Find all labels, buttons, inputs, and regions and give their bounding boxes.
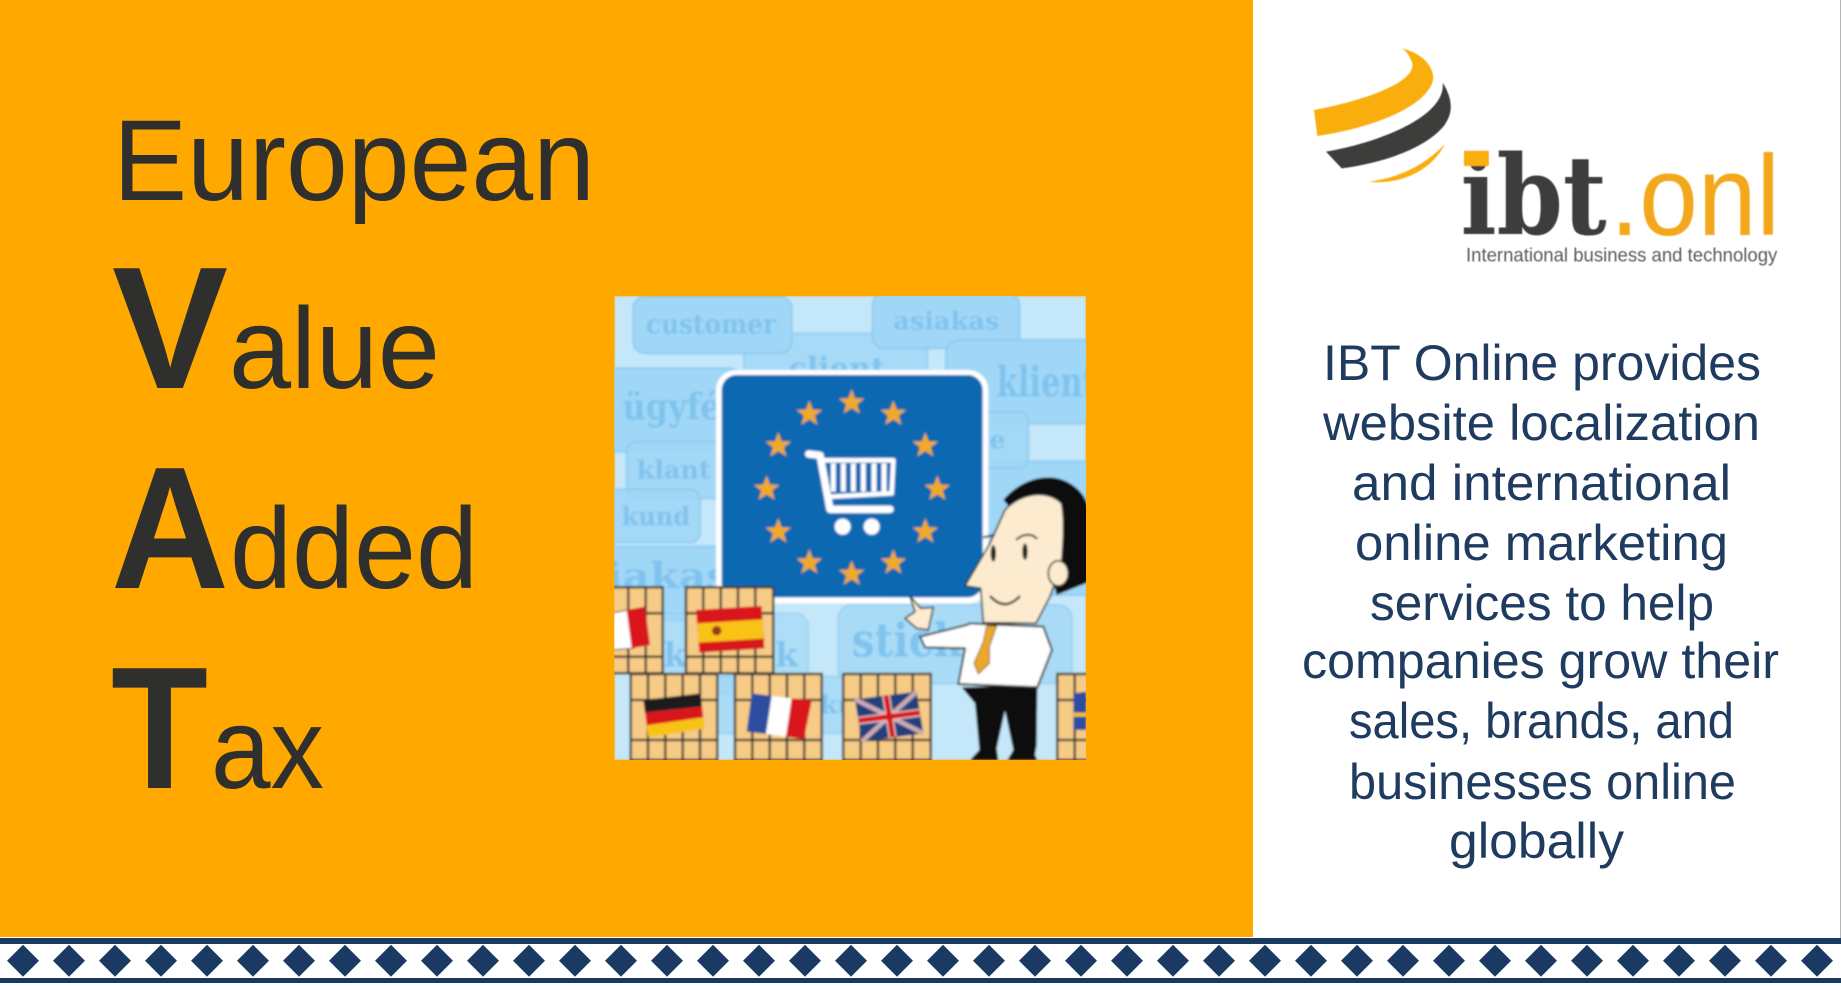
- illustration background: [614, 296, 1086, 760]
- word tags in many languages: client: [788, 351, 885, 386]
- word tags in many languages: ku: [820, 689, 856, 719]
- logo wordmark: ibt: [1461, 131, 1607, 260]
- face: [965, 494, 1064, 623]
- text block: company description: businesses online: [1349, 754, 1736, 810]
- crate: Spain flag: [686, 587, 773, 673]
- heading word: Value: alue: [229, 285, 440, 413]
- heading word: Tax: ax: [211, 685, 324, 813]
- crate: left flag: [607, 587, 663, 673]
- heading word: Added: dded: [230, 485, 478, 613]
- word tags in many languages: k: [663, 636, 687, 675]
- text block: company description: companies grow their: [1302, 633, 1779, 689]
- text block: company description: services to help: [1370, 575, 1714, 631]
- decorative diamond border band: [0, 937, 1841, 986]
- text block: company description: [1302, 335, 1779, 869]
- EU sign with stars and shopping cart: [716, 370, 988, 603]
- heading word: Value: [112, 230, 440, 425]
- ear: [1048, 561, 1068, 586]
- word tags in many languages: asiakas: [893, 305, 999, 335]
- crate: Germany flag: [631, 674, 717, 760]
- heading word: Added: A: [111, 430, 229, 625]
- logo tagline: International business and technology: [1466, 246, 1778, 267]
- illustration: EU online shopping with man, sign and crates: [600, 293, 1113, 760]
- text block: company description: globally: [1449, 813, 1624, 869]
- legs and shoes: [962, 685, 1037, 760]
- pointing hand: [905, 596, 933, 630]
- heading word: Added: [111, 430, 478, 625]
- logo globe swooshes: [1314, 48, 1451, 182]
- title: European Value Added Tax: [111, 97, 595, 825]
- shirt and arm: [920, 623, 1052, 687]
- panel: orange background: [0, 0, 1253, 938]
- word tags in many languages: klient: [997, 358, 1097, 407]
- necktie: [974, 626, 997, 674]
- word tags in many languages: ügyfél: [623, 385, 733, 428]
- heading word: European: European: [113, 97, 595, 225]
- logo wordmark: [1461, 131, 1780, 260]
- word tags in many languages: stick: [852, 614, 963, 669]
- crate: France flag: [735, 674, 822, 760]
- heading word: Value: V: [112, 230, 228, 425]
- word tags in many languages: [600, 293, 1113, 733]
- logo: ibt.onl: [1314, 48, 1780, 267]
- shipping crates with flags: [607, 587, 1104, 760]
- cartoon man pointing at the sign: [905, 477, 1090, 760]
- text block: company description: sales, brands, and: [1349, 693, 1734, 749]
- word tags in many languages: k: [775, 636, 799, 675]
- heading word: Tax: [111, 630, 324, 825]
- text block: company description: and international: [1352, 455, 1731, 511]
- text block: company description: IBT Online provides: [1323, 335, 1761, 391]
- text block: company description: website localization: [1322, 395, 1760, 451]
- logo wordmark: .onl: [1610, 133, 1780, 260]
- word tags in many languages: customer: [646, 309, 777, 340]
- hair: [1003, 477, 1090, 595]
- shopping cart icon: [809, 454, 893, 535]
- word tags in many languages: iakas: [607, 554, 730, 597]
- crate: right edge flag: [1054, 671, 1086, 760]
- facial features: [984, 535, 1037, 604]
- crate: United Kingdom flag: [843, 674, 931, 760]
- word tags in many languages: klant: [637, 454, 711, 484]
- ring of EU stars: [754, 389, 950, 585]
- word tags in many languages: e: [989, 424, 1005, 454]
- panel: white sidebar: [1253, 0, 1841, 938]
- word tags in many languages: kund: [622, 501, 690, 531]
- text block: company description: online marketing: [1355, 515, 1728, 571]
- heading word: Tax: T: [111, 630, 208, 825]
